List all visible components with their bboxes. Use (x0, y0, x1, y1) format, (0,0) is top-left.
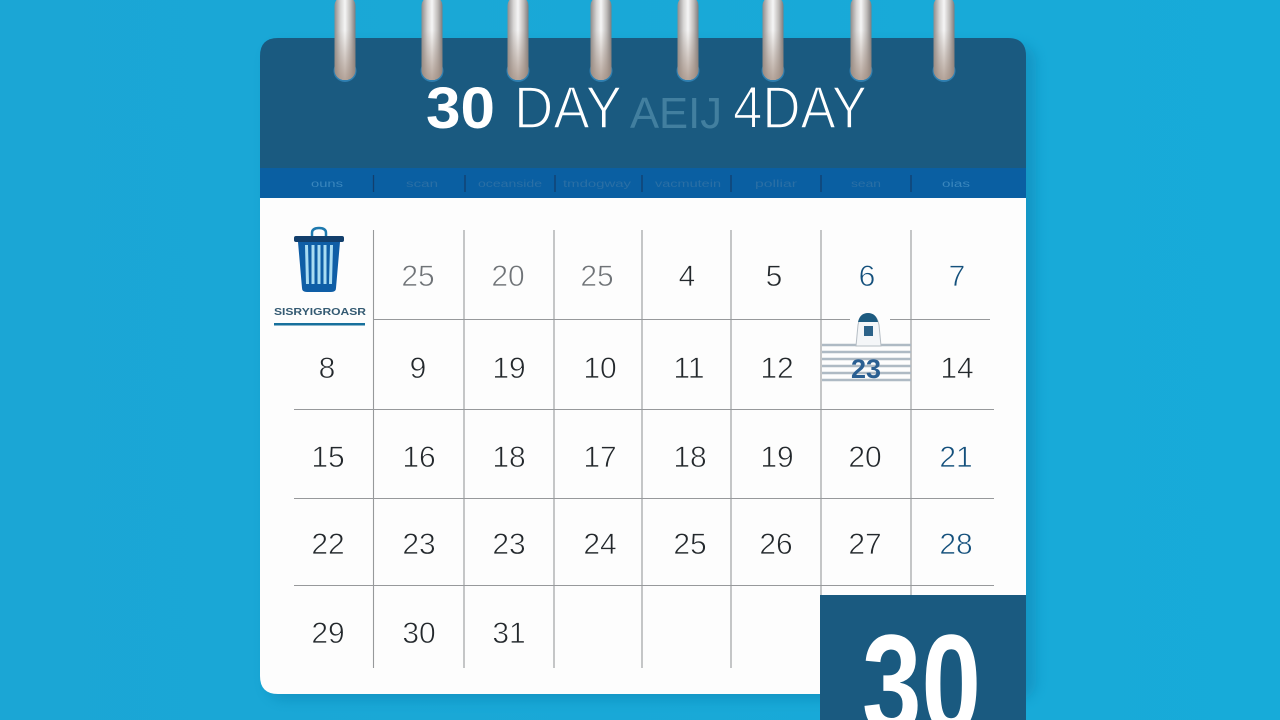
date numbers: 9 (410, 352, 426, 385)
date numbers: 8 (319, 352, 335, 385)
date numbers: 5 (766, 260, 782, 293)
date numbers: 25 (673, 528, 707, 561)
title: AEIJ (630, 89, 722, 138)
date numbers: 24 (583, 528, 617, 561)
date numbers: 31 (492, 617, 526, 650)
weekday band (260, 168, 1026, 198)
date numbers (311, 260, 974, 650)
date numbers: 6 (859, 260, 875, 293)
title: DAY (514, 75, 622, 141)
date numbers: 11 (673, 352, 705, 385)
weekday band: tmdogway (563, 179, 631, 190)
date numbers: 19 (492, 352, 526, 385)
calendar shadow (266, 44, 1036, 700)
date numbers: 26 (759, 528, 793, 561)
date numbers: 28 (939, 528, 973, 561)
title: 30 (426, 76, 495, 141)
date numbers: 18 (492, 441, 526, 474)
date numbers: 25 (401, 260, 435, 293)
weekday band: ouns (311, 179, 343, 190)
date numbers: 29 (311, 617, 345, 650)
date numbers: 22 (311, 528, 345, 561)
weekday band: oceanside (478, 179, 543, 190)
trash icon (294, 228, 344, 292)
calendar (260, 0, 1026, 694)
trash label: SISRYIGROASR (274, 307, 367, 318)
weekday band: polliar (755, 179, 798, 190)
date numbers: 25 (580, 260, 614, 293)
title (426, 75, 867, 141)
date numbers: 15 (311, 441, 345, 474)
weekday band: oias (942, 179, 970, 190)
day counter badge (820, 595, 1026, 720)
date numbers: 7 (949, 260, 965, 293)
date numbers: 20 (848, 441, 882, 474)
date numbers: 19 (760, 441, 794, 474)
date numbers: 14 (940, 352, 974, 385)
date numbers: 10 (583, 352, 617, 385)
date numbers: 12 (760, 352, 794, 385)
calendar page (260, 198, 1026, 694)
marked day 13 with small icon (822, 313, 911, 384)
date numbers: 23 (402, 528, 436, 561)
weekday band: scan (406, 179, 438, 190)
date numbers: 20 (491, 260, 525, 293)
calendar grid (294, 230, 994, 668)
date numbers: 21 (939, 441, 973, 474)
weekday band: sean (851, 179, 881, 190)
marked day 13 with small icon: 23 (851, 354, 881, 384)
date numbers: 27 (848, 528, 882, 561)
date numbers: 16 (402, 441, 436, 474)
date numbers: 23 (492, 528, 526, 561)
title: 4DAY (733, 75, 867, 141)
weekday band: vacmutein (655, 179, 721, 190)
trash label (274, 307, 367, 326)
date numbers: 17 (583, 441, 617, 474)
date numbers: 30 (402, 617, 436, 650)
spiral rings (334, 0, 956, 82)
header panel (260, 38, 1026, 168)
date numbers: 18 (673, 441, 707, 474)
date numbers: 4 (679, 260, 695, 293)
